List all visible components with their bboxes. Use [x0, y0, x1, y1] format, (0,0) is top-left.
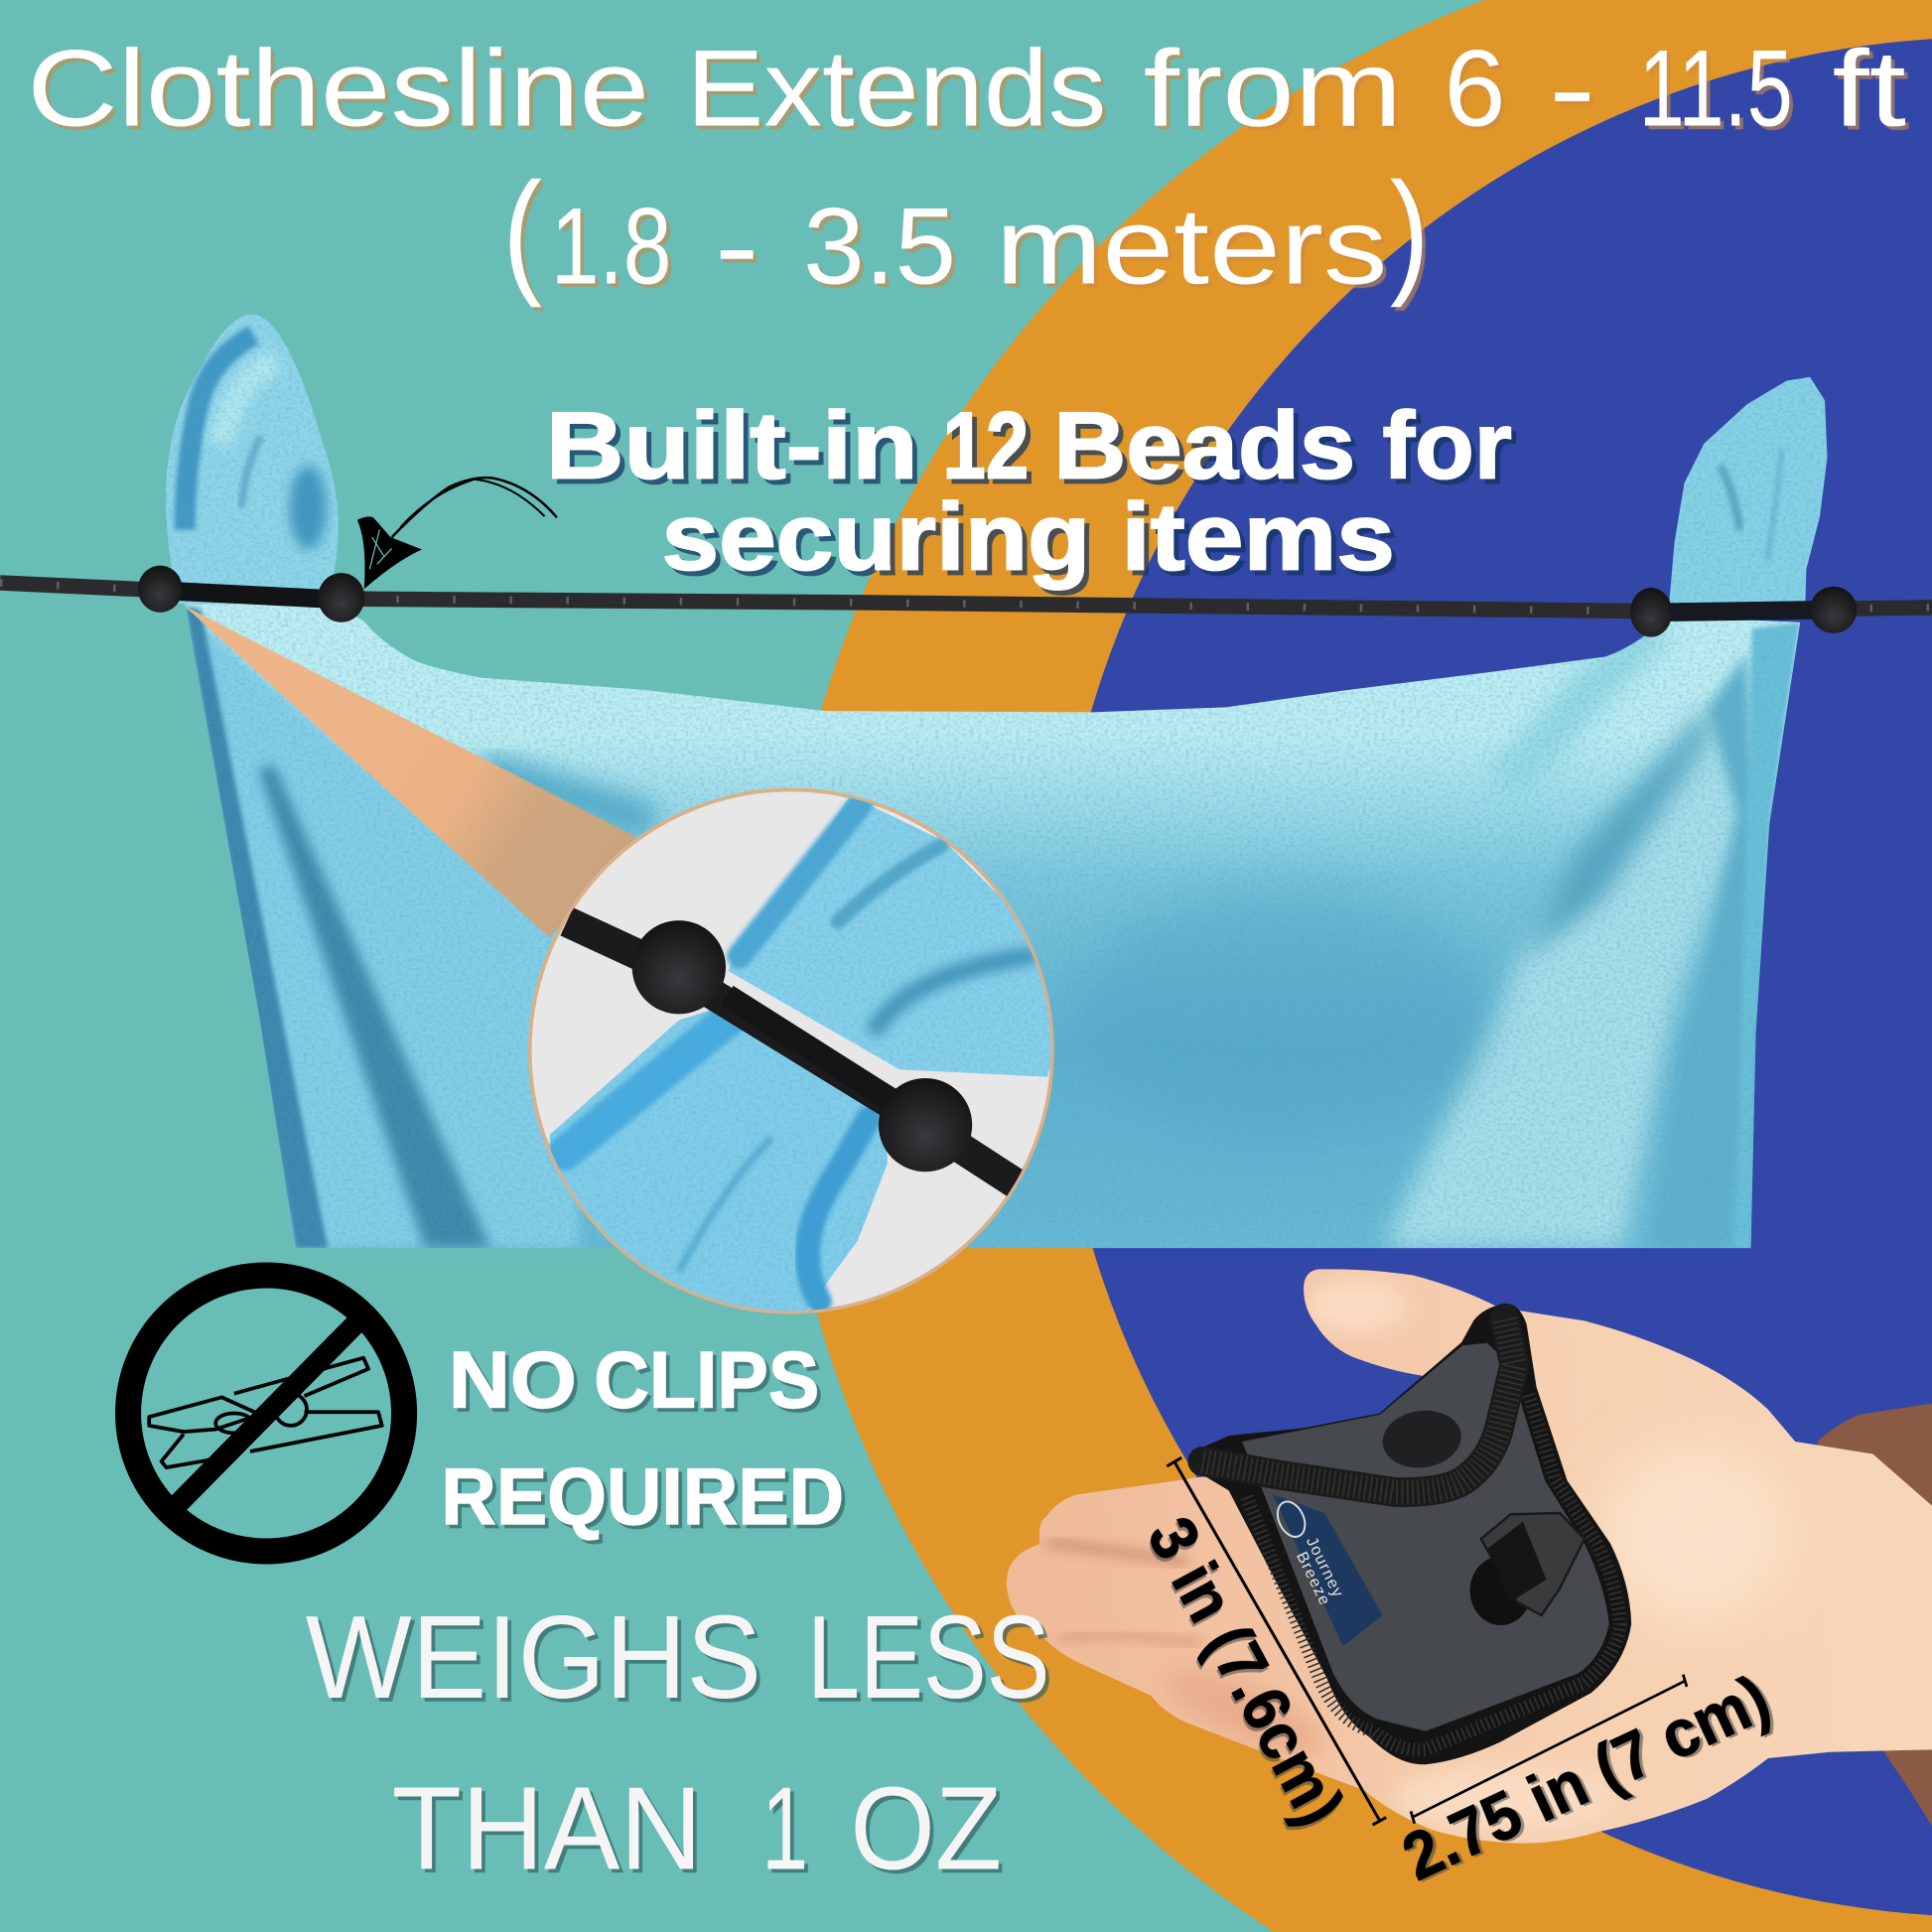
right towel ear: [1670, 377, 1827, 604]
background: orange arc: [776, 0, 1932, 1932]
title line 2: 3.5: [803, 186, 956, 307]
dimension: width line: [1411, 1675, 1687, 1824]
pouch flap edge: [1202, 1318, 1514, 1492]
text: required: REQUIRED: [441, 1452, 844, 1542]
title line 1: from: [1144, 29, 1402, 150]
text: than 1 oz: OZ: [850, 1763, 1002, 1895]
text: no clips: NO: [449, 1335, 577, 1425]
right hem strip: [1659, 651, 1752, 1249]
title line 2: meters: [996, 186, 1387, 307]
pouch: [1192, 1305, 1630, 1763]
text: weighs less: WEIGHS: [306, 1591, 761, 1724]
bead 4: [1810, 587, 1857, 633]
brand label: [1273, 1494, 1382, 1646]
title line 2: [502, 154, 1430, 308]
lens bead upper: [632, 920, 726, 1014]
text: weighs less: LESS: [807, 1591, 1049, 1724]
lens rope: [567, 921, 1017, 1184]
right dark fold: [1522, 709, 1716, 961]
pouch binding weave: [1247, 1392, 1620, 1750]
heading: built-in beads line 1: Built-in: [546, 393, 918, 499]
text: no clips: CLIPS: [594, 1335, 819, 1425]
title line 2: (: [502, 154, 542, 308]
towel left lobe: [185, 607, 579, 1248]
towel texture: [173, 604, 1811, 1257]
snap button: [1379, 1406, 1464, 1472]
left edge hem: [185, 607, 328, 1248]
bead 2: [318, 573, 364, 622]
bead 1: [138, 566, 183, 613]
title line 1: 11.5: [1639, 29, 1793, 150]
brand label: Journey: [1303, 1534, 1347, 1600]
towel hanging on line: [148, 308, 1836, 1257]
title line 1: ft: [1832, 29, 1906, 150]
title line 1: 6: [1445, 29, 1506, 150]
lens lower cloth: [550, 1006, 888, 1318]
pouch binding: [1192, 1305, 1630, 1763]
lens bead lower: [879, 1078, 972, 1172]
magnifier lens: rope and beads close-up: [530, 788, 1059, 1318]
heading: built-in beads line 1: Beads: [1053, 393, 1355, 499]
dimension: height line: [1167, 1457, 1386, 1825]
right light fold: [1376, 796, 1733, 1249]
buckle and strap: [1470, 1513, 1585, 1625]
dimension: width label: 2.75 in (7 cm): [1392, 1661, 1781, 1895]
peach callout wedge: [185, 607, 635, 937]
hand holding pouch: [986, 1257, 1932, 1861]
title line 2: 1.8: [551, 186, 671, 307]
text: weighs less: [306, 1591, 1049, 1724]
towel body: [173, 604, 1811, 1257]
bead 3: [1630, 588, 1672, 637]
text: than 1 oz: 1: [761, 1763, 808, 1895]
left towel ear: [166, 314, 339, 604]
lens cloth texture: [530, 788, 1059, 1318]
heading: built-in beads line 1: [546, 393, 1512, 499]
heading: built-in beads line 1: for: [1382, 393, 1512, 499]
flap weave: [1202, 1318, 1514, 1492]
title line 1: Extends: [686, 29, 1106, 150]
sleeve cuff: [1818, 1404, 1932, 1826]
title line 1: Clothesline: [27, 29, 649, 150]
title line 1: [27, 29, 1906, 150]
text: than 1 oz: [392, 1763, 1002, 1895]
left fold shadow: [259, 763, 490, 1248]
background: blue circle: [1052, 39, 1932, 1915]
title line 2: ): [1390, 154, 1430, 308]
pouch grey body: [1242, 1343, 1609, 1731]
heading: built-in beads line 2: items: [1121, 483, 1395, 590]
brand label: Breeze: [1293, 1549, 1334, 1609]
title line 2: -: [715, 186, 759, 307]
icon: no clips prohibition sign: [128, 1276, 404, 1552]
text: than 1 oz: THAN: [392, 1763, 702, 1895]
heading: built-in beads line 1: 12: [942, 393, 1029, 499]
heading: built-in beads line 2: [661, 483, 1395, 590]
lens upper cloth: [728, 796, 1057, 1077]
palm and fingers: [986, 1257, 1932, 1861]
dimension: height label: 3 in (7.6cm): [1133, 1506, 1358, 1837]
clothespin outline: [149, 1358, 382, 1467]
text: no clips: [449, 1335, 819, 1425]
heading: built-in beads line 2: securing: [661, 483, 1090, 590]
icon: hand-drawn arrow: [357, 478, 557, 589]
clothesline rope: [0, 566, 1932, 637]
title line 1: -: [1549, 29, 1595, 150]
lens cloth seams: [564, 803, 1029, 1302]
